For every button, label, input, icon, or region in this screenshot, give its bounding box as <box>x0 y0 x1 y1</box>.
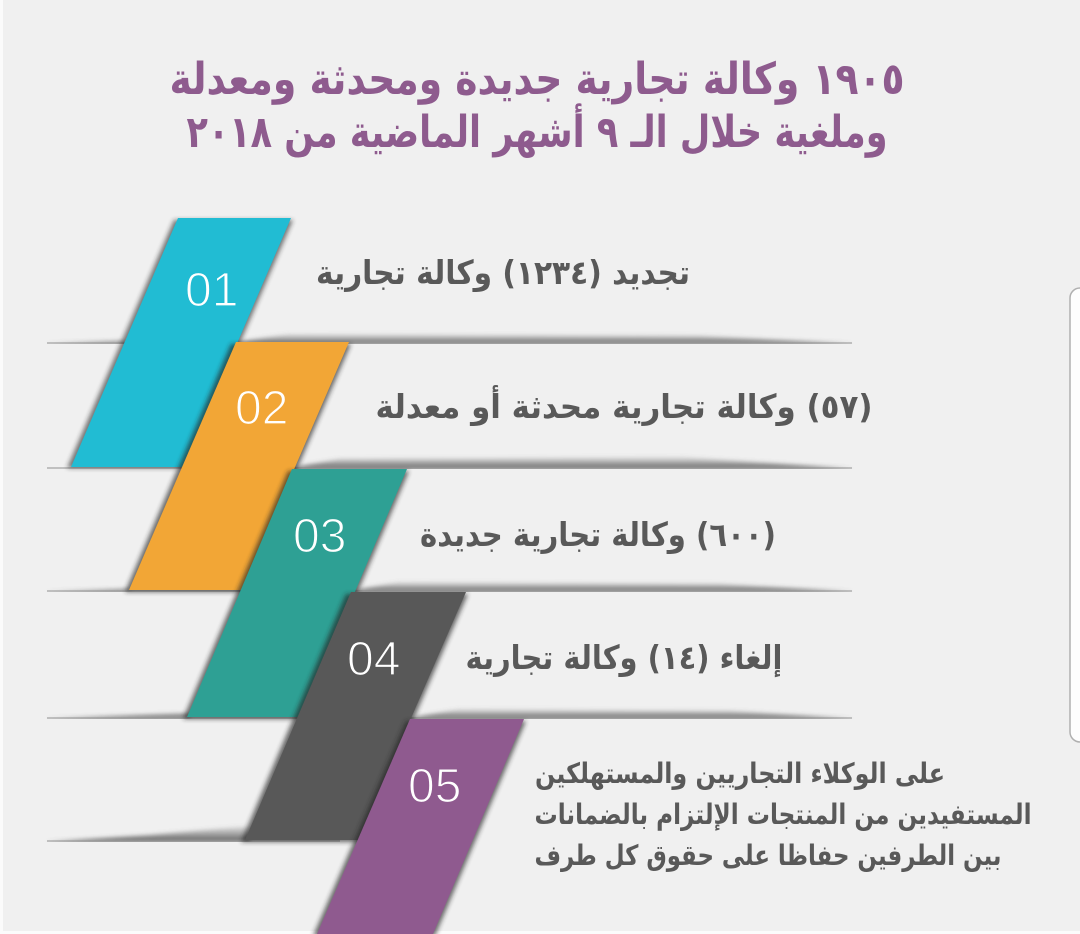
panel 05 <box>313 719 526 934</box>
number 02: 02 <box>235 382 288 435</box>
panel 04 <box>241 592 468 842</box>
item text 04: إلغاء (١٤) وكالة تجارية <box>466 638 782 678</box>
item text 05 <box>534 757 1032 872</box>
title: ١٩٠٥ وكالة تجارية جديدة ومحدثة ومعدلة <box>170 54 904 105</box>
number 04: 04 <box>347 633 400 686</box>
side panel <box>1070 288 1080 742</box>
number 01: 01 <box>185 264 238 317</box>
panel 03 <box>183 469 409 719</box>
item text 01: تجديد (١٢٣٤) وكالة تجارية <box>316 253 690 293</box>
title: وملغية خلال الـ ٩ أشهر الماضية من ٢٠١٨ <box>186 103 887 158</box>
item text 02: (٥٧) وكالة تجارية محدثة أو معدلة <box>376 385 872 427</box>
item text 03: (٦٠٠) وكالة تجارية جديدة <box>420 515 776 555</box>
panel 01 <box>67 218 293 468</box>
panel 02 <box>125 342 351 592</box>
item text 05: على الوكلاء التجاريين والمستهلكين <box>535 757 945 790</box>
number 03: 03 <box>293 510 346 563</box>
horizontal shelves with shadows <box>47 334 852 842</box>
number 05: 05 <box>408 760 461 813</box>
title <box>170 54 904 158</box>
